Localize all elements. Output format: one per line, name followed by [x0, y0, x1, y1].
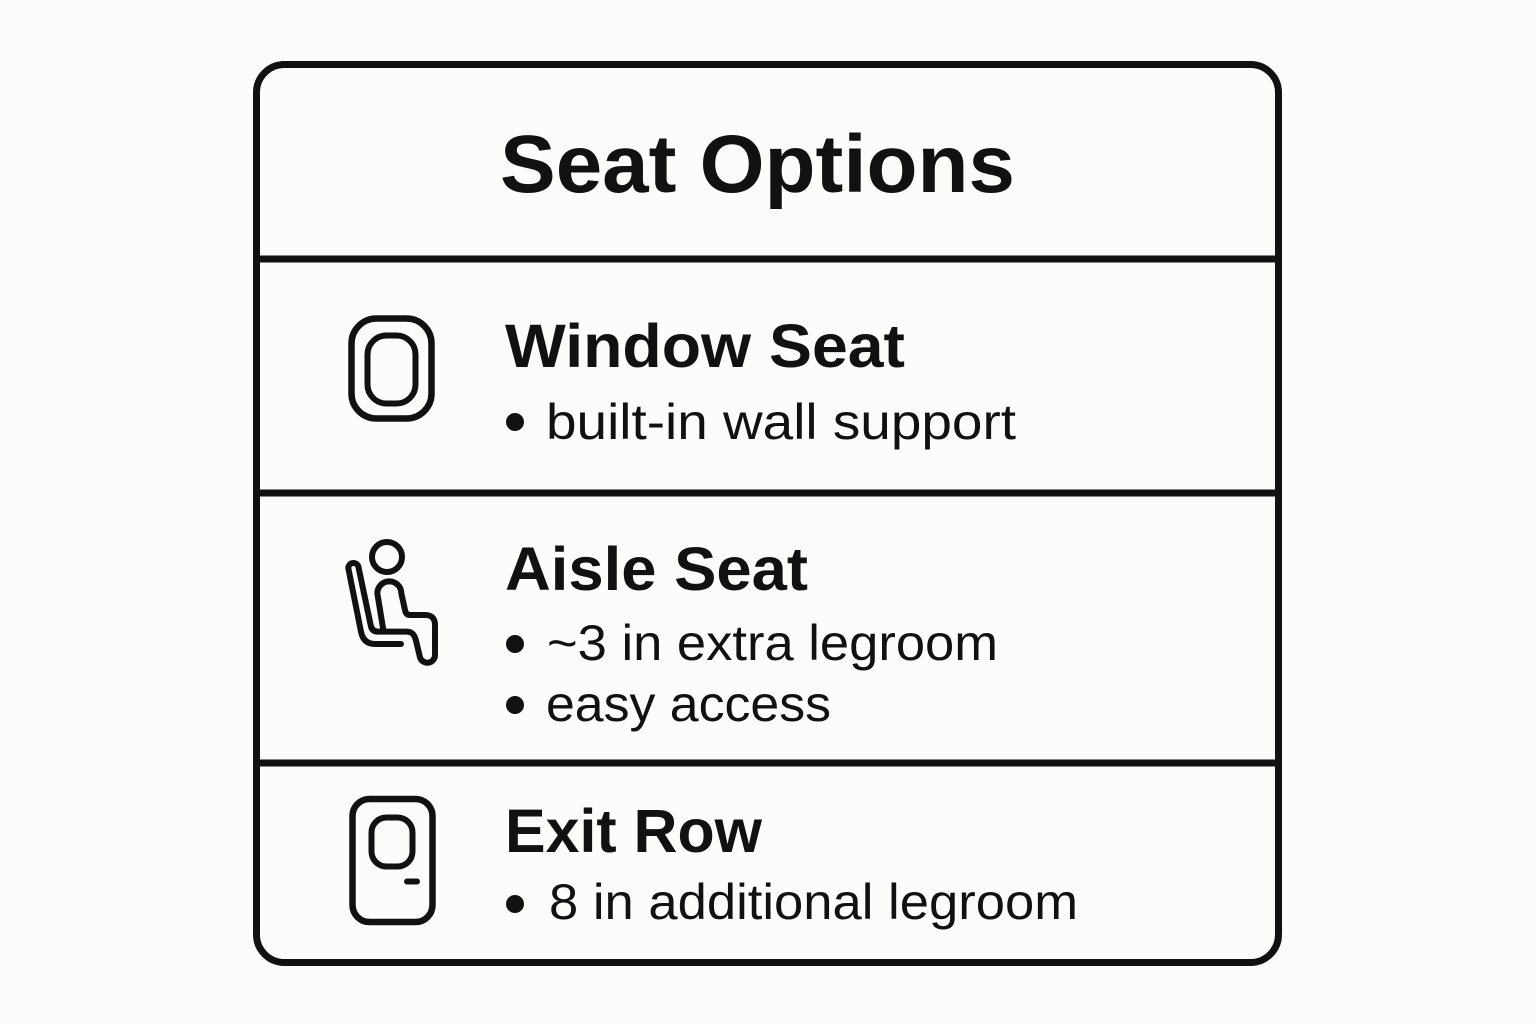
bullet list: aisle seat: easy access — [546, 676, 831, 732]
panel: aisle seat row — [348, 535, 998, 732]
panel: exit row — [352, 797, 1078, 930]
bullet list: aisle seat — [506, 615, 998, 732]
icon: airplane window — [352, 318, 432, 418]
heading: window seat: Window Seat — [505, 312, 905, 380]
heading: aisle seat: Aisle Seat — [505, 535, 808, 603]
icon: exit door — [352, 799, 432, 922]
title: Seat Options — [500, 119, 1015, 210]
icon: seated passenger — [348, 542, 435, 663]
panel: seat options card — [256, 64, 1278, 962]
bullet list: window seat: built-in wall support — [546, 394, 1016, 450]
bullet list: exit row: 8 in additional legroom — [549, 874, 1078, 930]
heading: exit row: Exit Row — [505, 797, 763, 865]
panel: window seat row — [352, 312, 1016, 450]
bullet list: aisle seat: ~3 in extra legroom — [547, 615, 998, 671]
